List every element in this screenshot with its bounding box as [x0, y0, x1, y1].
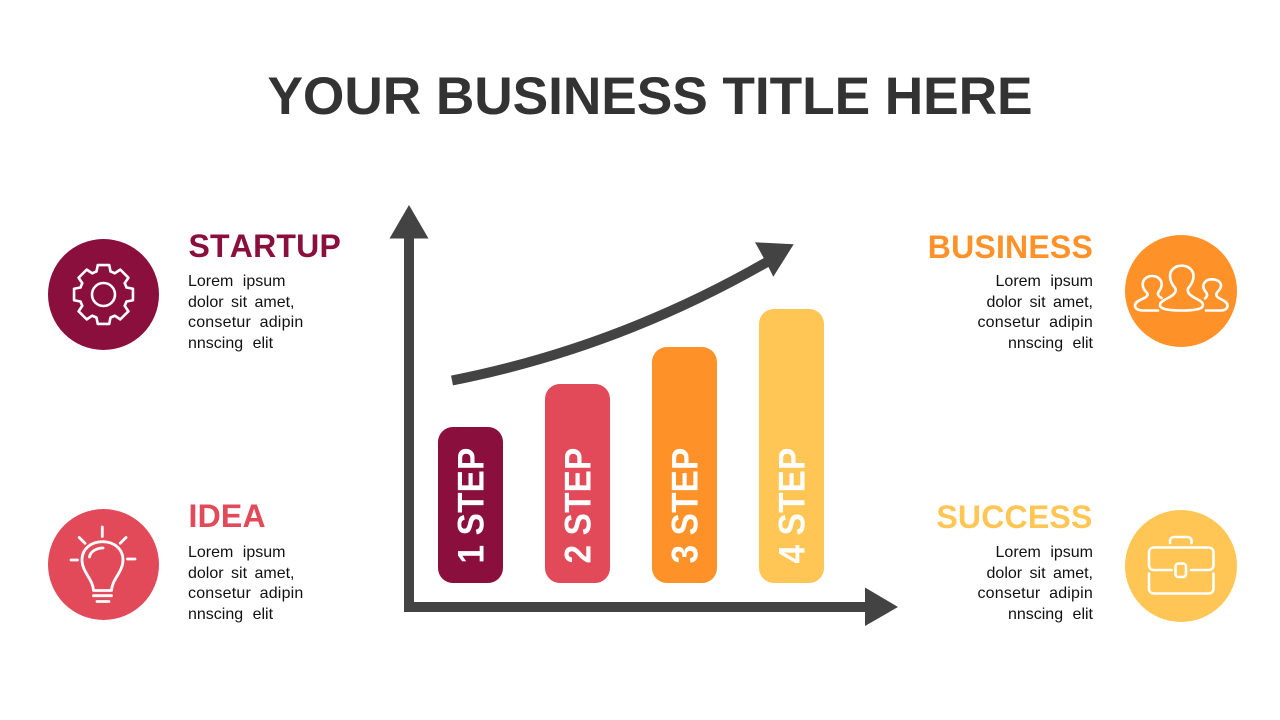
text: success description: dolor sit amet,: [987, 564, 1093, 582]
panel: idea: [188, 498, 304, 622]
heading: startup: STARTUP: [188, 228, 341, 264]
text: business description: nnscing elit: [1008, 334, 1093, 352]
text: startup description: dolor sit amet,: [188, 294, 294, 310]
bar: 3 step: [652, 347, 717, 583]
text: idea description: dolor sit amet,: [188, 564, 294, 582]
text: startup description: Lorem ipsum: [188, 273, 285, 290]
text: success description: [977, 544, 1093, 622]
panel: startup: [188, 228, 341, 352]
title: YOUR BUSINESS TITLE HERE: [267, 67, 1033, 126]
growth arrow: [452, 242, 794, 380]
text: startup description: consetur adipin: [188, 314, 304, 331]
text: startup description: [188, 273, 304, 352]
panel: business: [928, 229, 1093, 352]
text: business description: dolor sit amet,: [987, 294, 1093, 310]
horizontal axis arrow: [404, 588, 898, 626]
heading: business: BUSINESS: [928, 229, 1093, 265]
text: business description: [977, 273, 1093, 352]
bar: 4 step: [759, 309, 824, 583]
vertical axis arrow: [390, 205, 428, 612]
text: idea description: consetur adipin: [188, 585, 304, 602]
label: 3 step: 3 STEP: [666, 448, 707, 564]
text: success description: nnscing elit: [1008, 606, 1093, 622]
label: 4 step: 4 STEP: [773, 448, 814, 564]
text: startup description: nnscing elit: [188, 334, 273, 352]
text: idea description: Lorem ipsum: [188, 544, 285, 561]
text: business description: consetur adipin: [977, 314, 1093, 331]
bar: 1 step: [438, 427, 503, 583]
text: idea description: [188, 544, 304, 622]
text: idea description: nnscing elit: [188, 606, 273, 622]
heading: success: SUCCESS: [936, 499, 1092, 535]
text: success description: consetur adipin: [977, 585, 1093, 602]
text: business description: Lorem ipsum: [996, 273, 1093, 290]
label: 1 step: 1 STEP: [452, 448, 493, 564]
panel: success: [936, 499, 1093, 622]
bar: 2 step: [545, 384, 610, 583]
label: 2 step: 2 STEP: [559, 448, 600, 564]
heading: idea: IDEA: [188, 498, 266, 534]
text: success description: Lorem ipsum: [996, 544, 1093, 561]
